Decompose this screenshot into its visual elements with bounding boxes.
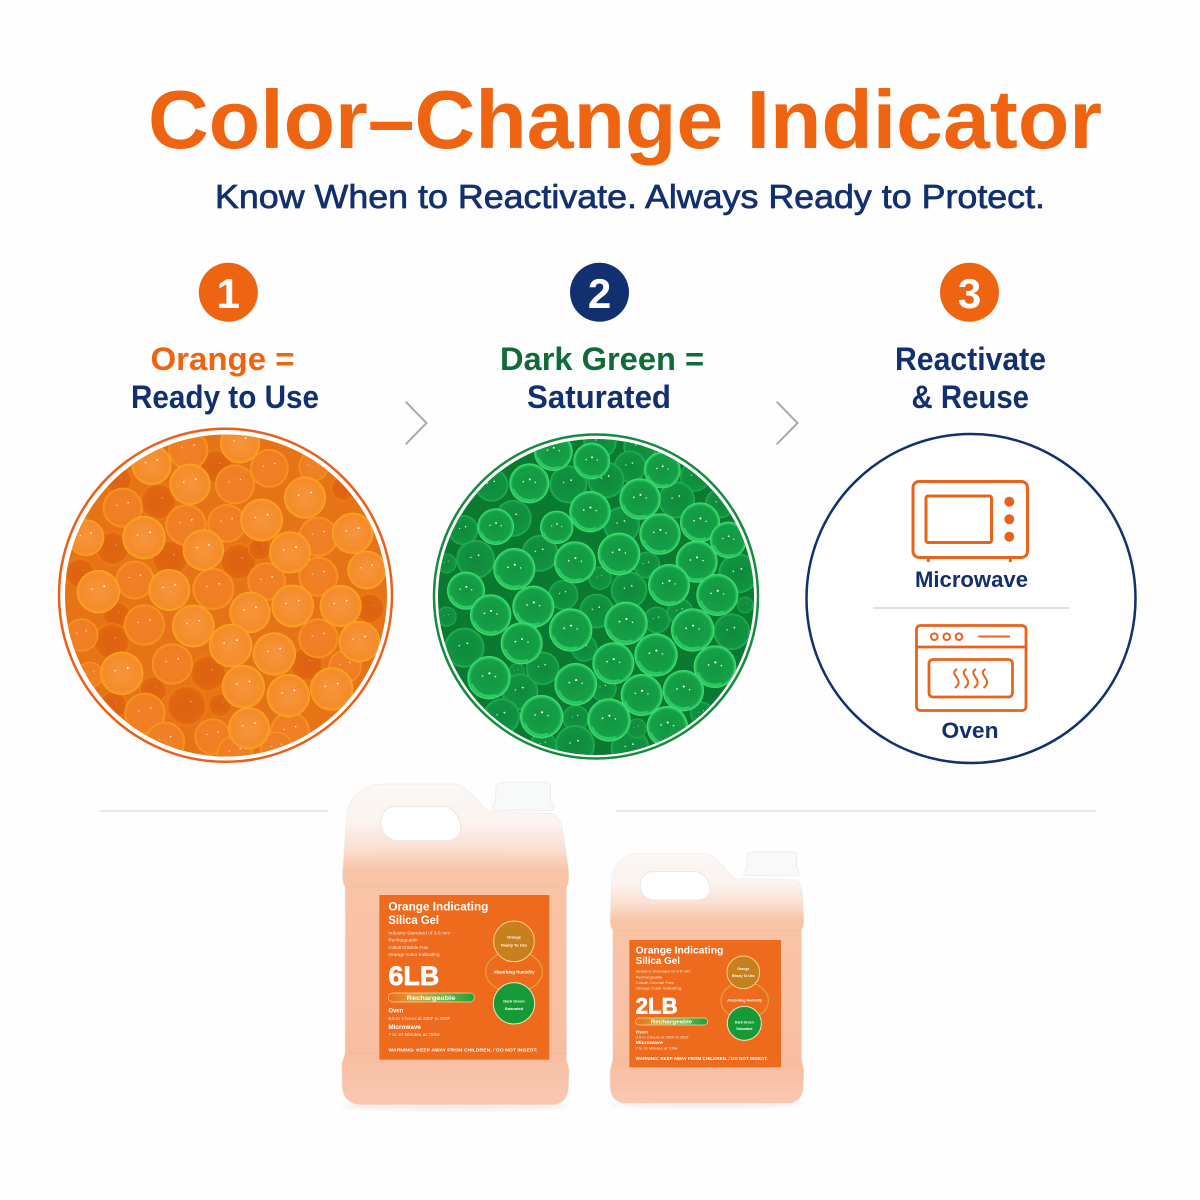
step 1 label: Orange = [150,341,294,377]
icon: oven [916,626,1026,710]
step 2 number badge: 2 [588,270,611,317]
step 3 label: & Reuse [912,379,1029,415]
step 3 label [895,341,1046,415]
product label 2LB: WARNING: KEEP AWAY FROM CHILDREN. / DO NOT INGEST. [636,1056,768,1061]
color change diagram: Absorbing Humidity [493,970,535,975]
rechargeable pill [636,1018,708,1025]
step 1 label: Ready to Use [131,379,319,415]
step 1 number badge: 1 [217,270,240,317]
product: 6LB jug [342,783,569,1110]
icon: microwave [913,482,1028,562]
arrow: step 1 to step 2 [406,402,426,444]
product label 6LB: Cobalt Chloride Free [388,945,429,950]
color change diagram: Absorbing Humidity [727,998,763,1002]
product label 2LB: Microwave [636,1040,663,1046]
rechargeable pill: Rechargeable [651,1019,692,1025]
color change diagram: Orange [507,935,522,940]
product label 6LB: Silica Gel [388,913,439,927]
jug cap [493,783,553,811]
product label 6LB: Orange Indicating [388,900,488,914]
product label 2LB: Industry Standard of 3-5 mm [636,969,691,974]
product label 2LB: Rechargeable [636,974,663,979]
step 3 label: Reactivate [895,341,1046,377]
jug body [342,784,569,1105]
product label 6LB: Microwave [388,1025,422,1031]
panel: reactivation methods [806,434,1136,763]
step 2 label: Dark Green = [500,341,704,377]
subtitle: Know When to Reactivate. Always Ready to Protect. [215,178,1045,215]
product label 2LB [629,940,781,1067]
jug body [610,853,804,1103]
color change diagram: Dark Green [735,1020,754,1024]
color change diagram: Orange [737,967,749,971]
product label 2LB: Oven [636,1029,648,1035]
step 1 heading [131,263,319,415]
step 2 heading [500,263,704,415]
jug handle opening [381,807,461,841]
product label 6LB: Orange Color Indicating [388,952,440,957]
product label 6LB: Rechargeable [388,938,418,943]
product label 2LB: 2LB [636,993,678,1018]
jug cap [744,852,799,875]
color change diagram: Saturated [736,1027,752,1031]
product: 2LB jug [610,852,804,1107]
arrow: step 2 to step 3 [777,402,798,444]
step 3 number badge: 3 [958,270,981,317]
oven label: Oven [942,718,998,743]
panel: dark green saturated beads [430,425,765,768]
color change diagram: Saturated [505,1006,524,1011]
product label 2LB: Orange Color Indicating [636,985,681,990]
product label 2LB: 0.5 to 3 hours at 250F to 250F [636,1036,690,1040]
product label 2LB: Orange Indicating [636,945,723,956]
product label 2LB: Cobalt Chloride Free [636,980,675,985]
product label 6LB: 6LB [388,961,439,991]
step 1 label [131,341,319,415]
step 3 heading [895,263,1046,415]
step 2 number badge [570,263,629,322]
product label 6LB [379,895,549,1060]
color change diagram: Ready To Use [501,942,528,947]
color change diagram [486,921,542,1024]
jug handle opening [640,872,710,900]
title: Color–Change Indicator [148,73,1102,166]
color change diagram: Ready To Use [732,974,755,978]
product label 6LB: WARNING: KEEP AWAY FROM CHILDREN. / DO NOT INGEST. [388,1048,538,1054]
product label 2LB: 7 to 10 Minutes at 700w [636,1046,678,1050]
product label 6LB: Oven [388,1009,404,1015]
product label 6LB: 6.5 to 3 hours at 250F to 250F [388,1016,451,1021]
rechargeable pill: Rechargeable [407,995,456,1002]
color change diagram: Dark Green [503,999,525,1004]
rechargeable pill [388,993,474,1002]
color change diagram [721,956,768,1040]
product label 6LB: Industry Standard of 3-5 mm [388,931,451,936]
step 2 label: Saturated [527,379,671,415]
product label 6LB: 7 to 10 Minutes at 750w [388,1032,441,1037]
step 3 number badge [940,263,999,322]
panel: orange silica gel beads [59,423,395,772]
step 1 number badge [199,263,258,322]
step 2 label [500,341,704,415]
microwave label: Microwave [915,567,1028,592]
product label 2LB: Silica Gel [636,956,680,967]
